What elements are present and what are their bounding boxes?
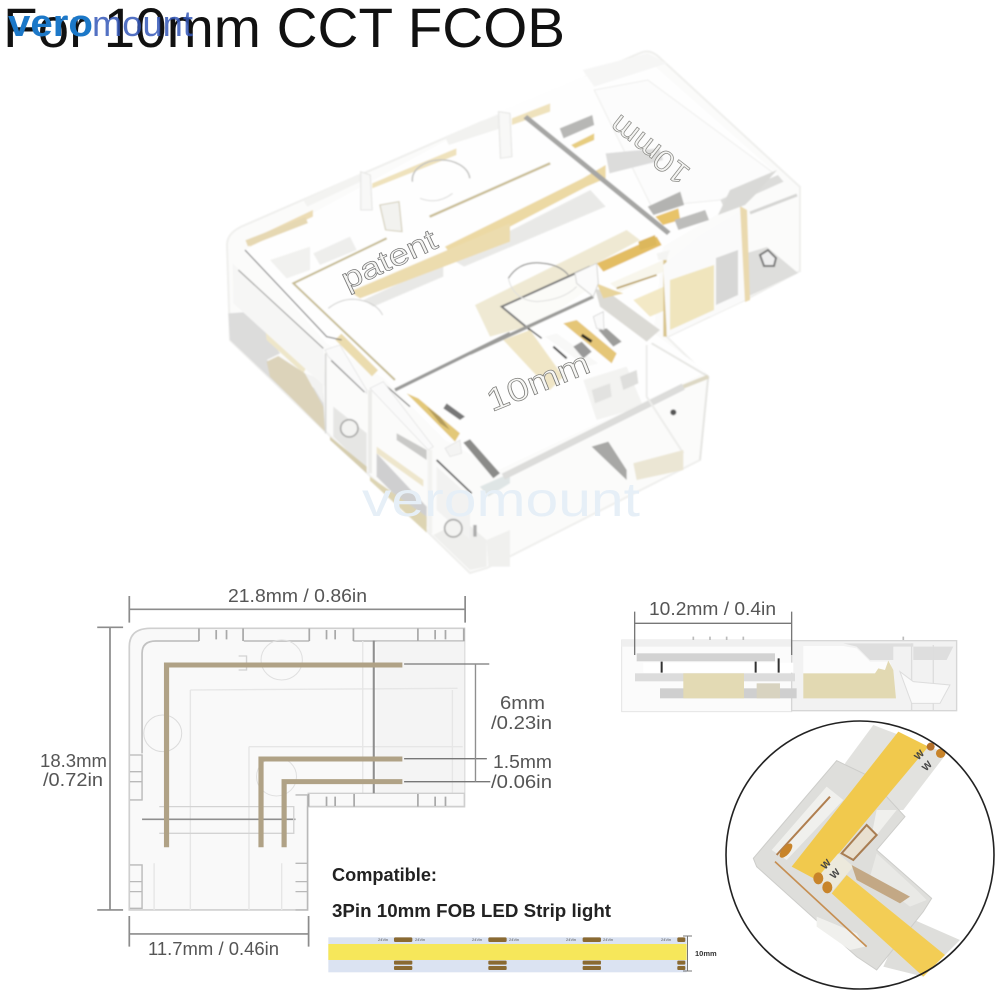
front contacts bbox=[407, 393, 460, 442]
strip voltage labels: 24Vin bbox=[378, 937, 388, 942]
diagram: side view bbox=[622, 599, 957, 712]
inner corner window bbox=[842, 825, 877, 860]
side plate bbox=[622, 640, 957, 712]
circular mark bbox=[412, 160, 470, 182]
label: width: 21.8mm / 0.86in bbox=[228, 586, 367, 606]
logo: veromount watermark bbox=[8, 3, 193, 45]
yellow COB strip upper arm bbox=[792, 732, 928, 880]
strip width label: 10mm bbox=[695, 949, 717, 958]
strip voltage labels bbox=[378, 937, 671, 942]
label: arm width: 11.7mm / 0.46in bbox=[148, 939, 279, 959]
side tabs bbox=[130, 755, 308, 910]
photo: connector with LED strip in circle: W bbox=[920, 759, 935, 774]
shadowed inner bands bbox=[453, 190, 606, 267]
strip name: 3Pin 10mm FOB LED Strip light bbox=[332, 901, 611, 921]
strip voltage labels: 24Vin bbox=[566, 937, 576, 942]
circle frame bbox=[726, 721, 994, 989]
upper rail bbox=[637, 653, 775, 661]
logo: veromount watermark: vero bbox=[8, 3, 93, 45]
center and right body details bbox=[470, 230, 730, 480]
soft shadows bbox=[270, 247, 310, 278]
strip voltage labels: 24Vin bbox=[661, 937, 671, 942]
solder pads bbox=[813, 872, 823, 884]
logo: veromount watermark: mount bbox=[92, 3, 193, 44]
label: depth: 10.2mm / 0.4in bbox=[649, 599, 776, 619]
connector body bbox=[753, 761, 932, 970]
top face bbox=[245, 60, 784, 470]
label: pin width bbox=[491, 752, 552, 792]
conductor traces bbox=[167, 665, 402, 847]
right end face bbox=[663, 170, 798, 337]
rod bbox=[395, 333, 510, 390]
strip width bracket bbox=[683, 936, 692, 971]
divider rails bbox=[371, 641, 377, 793]
beige conductor blocks bbox=[683, 673, 744, 698]
compatible heading: Compatible: bbox=[332, 865, 437, 885]
rod bbox=[470, 297, 593, 353]
strip voltage labels: 24Vin bbox=[415, 937, 425, 942]
top tabs bbox=[199, 628, 464, 807]
plate outline bbox=[129, 628, 464, 910]
engraved text: patent: patent bbox=[336, 223, 443, 296]
illustration: transparent L-shaped connector bbox=[227, 51, 800, 573]
clear posts bbox=[325, 345, 367, 393]
tabs along top edge bbox=[250, 210, 313, 247]
side gray faces bbox=[228, 312, 325, 430]
pins bbox=[545, 333, 598, 367]
label: conductor spacing: 6mm bbox=[500, 693, 545, 713]
tick marks bbox=[693, 637, 903, 640]
upper part of the body bbox=[245, 53, 784, 470]
corner gold tab bbox=[247, 220, 307, 243]
screws bbox=[341, 420, 358, 437]
solder pads row bbox=[394, 937, 685, 970]
LED strip illustration bbox=[328, 936, 717, 972]
strip backing bbox=[845, 725, 947, 810]
engraved text: 10mm front: 10mm bbox=[481, 345, 595, 418]
strip voltage labels: 24Vin bbox=[509, 937, 519, 942]
strip voltage labels: 24Vin bbox=[603, 937, 613, 942]
label: conductor spacing: /0.23in bbox=[491, 713, 552, 733]
WW marking gap bbox=[817, 853, 853, 890]
faint inner lines bbox=[154, 641, 463, 910]
clear post bbox=[660, 255, 670, 337]
front edges bbox=[503, 387, 683, 477]
pin markers bbox=[662, 658, 779, 673]
engraved text: 10mm rear: 10mm bbox=[603, 108, 696, 190]
lower beige bbox=[503, 330, 563, 390]
yellow COB strip lower arm bbox=[832, 875, 945, 977]
circle arc bbox=[508, 263, 568, 278]
beige frame block bbox=[475, 230, 640, 337]
edge lines bbox=[245, 250, 342, 340]
gray edge bbox=[525, 117, 669, 233]
label: pin width: /0.06in bbox=[491, 772, 552, 792]
lower left body faces bbox=[228, 220, 510, 570]
photo: connector with LED strip in circle bbox=[726, 721, 994, 989]
WW text: W bbox=[819, 857, 834, 872]
gold conductor band bbox=[363, 263, 443, 307]
overall dimension lines bbox=[97, 596, 465, 947]
label: conductor spacing bbox=[491, 693, 552, 733]
right-arm windows and contacts bbox=[560, 115, 594, 138]
photo: connector with LED strip in circle: W bbox=[828, 867, 843, 881]
window line bbox=[293, 238, 395, 380]
photo: connector with LED strip in circle: W bbox=[913, 748, 928, 763]
label: height: /0.72in bbox=[43, 770, 103, 790]
right arm interior bbox=[595, 288, 660, 342]
yellow COB band bbox=[328, 944, 687, 960]
circle arc bbox=[328, 299, 383, 315]
label: height bbox=[40, 751, 107, 790]
gold conductor band bbox=[445, 165, 606, 257]
label: height: 18.3mm bbox=[40, 751, 107, 771]
faint watermark: veromount bbox=[362, 474, 640, 527]
label: pin width: 1.5mm bbox=[493, 752, 552, 772]
diagram: top view dimension drawing bbox=[40, 586, 552, 959]
strip voltage labels: 24Vin bbox=[472, 937, 482, 942]
dimension bracket bbox=[635, 612, 792, 655]
clear posts bbox=[361, 172, 372, 210]
lower faces bbox=[333, 407, 367, 470]
strip board bbox=[328, 937, 687, 972]
leader lines bbox=[404, 664, 490, 782]
gold contact bbox=[597, 237, 662, 272]
connector silhouette bbox=[227, 51, 800, 573]
